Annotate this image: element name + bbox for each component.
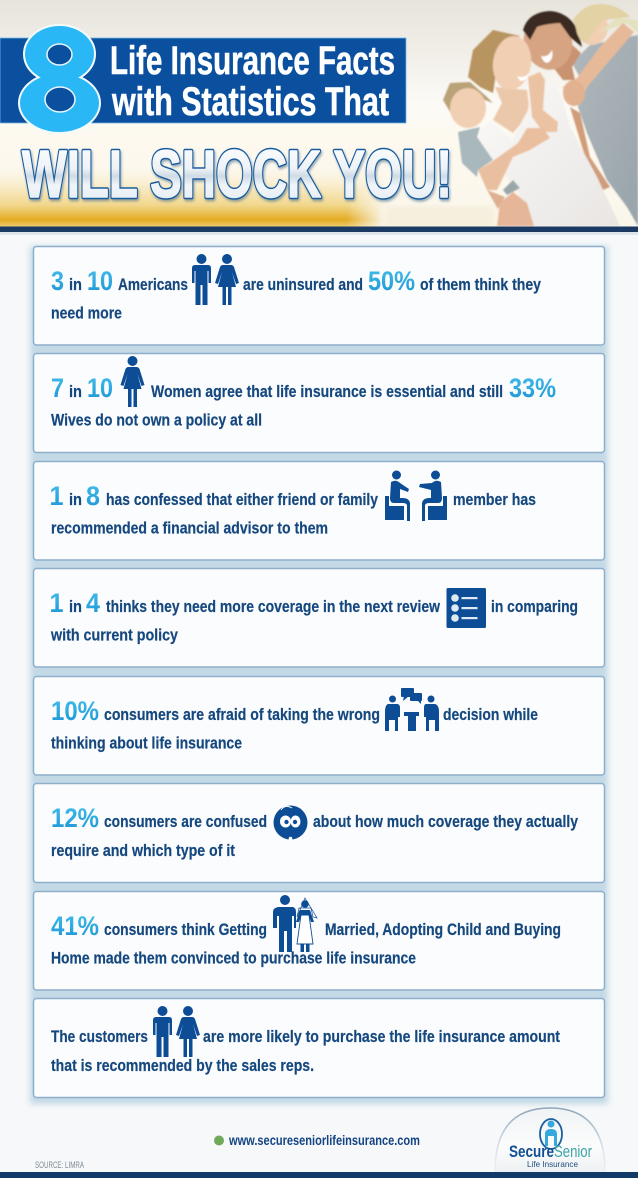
- small child: upper arm: [528, 72, 558, 132]
- small child: thigh: [487, 190, 505, 209]
- logo: Secure: [509, 1142, 554, 1161]
- logo: Life Insurance: [527, 1159, 578, 1169]
- fact 7: line 2: Home made them convinced to purchase life insurance: [51, 950, 416, 968]
- icon: website globe: [214, 1136, 224, 1146]
- man: hair: [523, 11, 582, 47]
- header bottom band: [0, 226, 638, 235]
- fact 1: uninsured: are uninsured and: [243, 276, 363, 294]
- fact 5: afraid: consumers are afraid of taking the wrong: [104, 706, 380, 724]
- fact 1: in: in: [69, 276, 82, 294]
- fact 6: about how much: about how much coverage they actually: [313, 813, 579, 831]
- fact 3: member has: member has: [453, 491, 536, 509]
- woman: shirt: [477, 83, 620, 226]
- title line 1: Life Insurance Facts: [110, 39, 395, 83]
- panel: fact 8: [34, 998, 604, 1098]
- source note: SOURCE: LIMRA: [35, 1160, 84, 1170]
- top child: face: [576, 9, 608, 45]
- small child: shirt lower: [503, 180, 520, 195]
- small child: leg: [497, 192, 534, 226]
- fact 3: line 2: recommended a financial advisor to them: [51, 520, 328, 538]
- fact 4: 1: 1: [50, 588, 64, 618]
- fact 7: 41%: 41%: [51, 911, 99, 941]
- fact 8: line 2: that is recommended by the sales reps.: [51, 1057, 314, 1075]
- man: shirt: [572, 35, 638, 226]
- title line 2: with Statistics That: [111, 80, 389, 124]
- fact 3: confessed: has confessed that either friend or family: [106, 491, 379, 509]
- fact 4: in: in: [69, 598, 82, 616]
- fact 4: thinks: thinks they need more coverage in the next review: [106, 598, 440, 616]
- man: hand: [563, 80, 585, 106]
- fact 2: in: in: [69, 383, 82, 401]
- woman: hair: [468, 30, 520, 93]
- fact 4: line 2: with current policy: [50, 626, 179, 644]
- top child: hair: [573, 4, 630, 42]
- header background: [0, 0, 638, 228]
- small child: face: [450, 88, 486, 128]
- panel: fact 3: [34, 462, 604, 560]
- icon: meeting with speech bubbles: [385, 688, 439, 731]
- fact 5: decision while: decision while: [443, 706, 538, 724]
- fact 2: line 2: Wives do not own a policy at all: [51, 412, 262, 430]
- card shadow column: [30, 246, 608, 1104]
- top child: shirt: [598, 18, 638, 33]
- fact 3: 1: 1: [50, 481, 64, 511]
- fact 5: 10%: 10%: [51, 696, 99, 726]
- fact 6: 12%: 12%: [51, 803, 99, 833]
- fact 2: 7: 7: [51, 373, 64, 403]
- family photo: [443, 4, 638, 226]
- icon: woman: [120, 356, 144, 407]
- top child: arm: [563, 23, 634, 103]
- fact 7: think getting: consumers think Getting: [104, 921, 267, 939]
- fact 1: 50%: 50%: [368, 266, 415, 296]
- icon: two people talking: [385, 470, 447, 521]
- panel: fact 2: [34, 354, 604, 452]
- title banner: [0, 38, 406, 123]
- fact 2: 33%: 33%: [509, 373, 556, 403]
- small child: lower arm: [478, 128, 550, 190]
- icon: confused face: [274, 806, 308, 840]
- man: mouth: [541, 50, 552, 63]
- fact 4: 4: 4: [86, 588, 100, 618]
- panel: fact 6: [34, 784, 604, 882]
- fact 1: americans: Americans: [118, 276, 188, 294]
- footer band: [0, 1172, 638, 1178]
- fact 6: confused: consumers are confused: [104, 813, 267, 831]
- woman: smile: [517, 73, 529, 81]
- title: will shock you: WILL SHOCK YOU!: [22, 137, 452, 212]
- fact 3: in: in: [69, 491, 82, 509]
- fact 2: 10: 10: [87, 373, 113, 403]
- fact 8: more likely: are more likely to purchase the life insurance amount: [203, 1028, 560, 1046]
- woman: neck and chest: [493, 87, 530, 133]
- title: will shock you: WILL SHOCK YOU!: [22, 137, 452, 212]
- fact 1: 10: 10: [87, 266, 113, 296]
- icon: bride and groom: [273, 895, 317, 952]
- title numeral 8: 8: [24, 11, 95, 154]
- icon: man and woman: [153, 1006, 200, 1057]
- icon: man and woman: [192, 254, 239, 305]
- small child: shirt: [458, 127, 493, 177]
- fact 1: of them: of them think they: [420, 276, 542, 294]
- woman: face: [489, 34, 535, 92]
- fact 4: in comparing: in comparing: [491, 598, 578, 616]
- fact 8: the customers: The customers: [51, 1028, 148, 1046]
- panel: fact 7: [34, 892, 604, 990]
- man: head: [518, 9, 578, 75]
- logo: Senior: [554, 1142, 592, 1161]
- small child: hair: [443, 82, 493, 115]
- panel: fact 5: [34, 676, 604, 775]
- panel: fact 4: [34, 568, 604, 667]
- fact 7: married: Married, Adopting Child and Buying: [325, 921, 561, 939]
- panel: fact 1: [34, 246, 604, 345]
- fact 1: line 2: need more: [51, 304, 122, 322]
- logo: [495, 1108, 605, 1172]
- man: neck: [553, 43, 581, 80]
- fact 2: women agree: Women agree that life insurance is essential and still: [151, 383, 503, 401]
- website url: www.secureseniorlifeinsurance.com: [228, 1132, 420, 1148]
- icon: checklist: [446, 588, 486, 628]
- fact 3: 8: 8: [86, 481, 100, 511]
- fact 5: line 2: thinking about life insurance: [51, 734, 242, 752]
- fact 1: 3: 3: [51, 266, 64, 296]
- fact 6: line 2: require and which type of it: [51, 842, 235, 860]
- man: arm behind: [570, 107, 610, 190]
